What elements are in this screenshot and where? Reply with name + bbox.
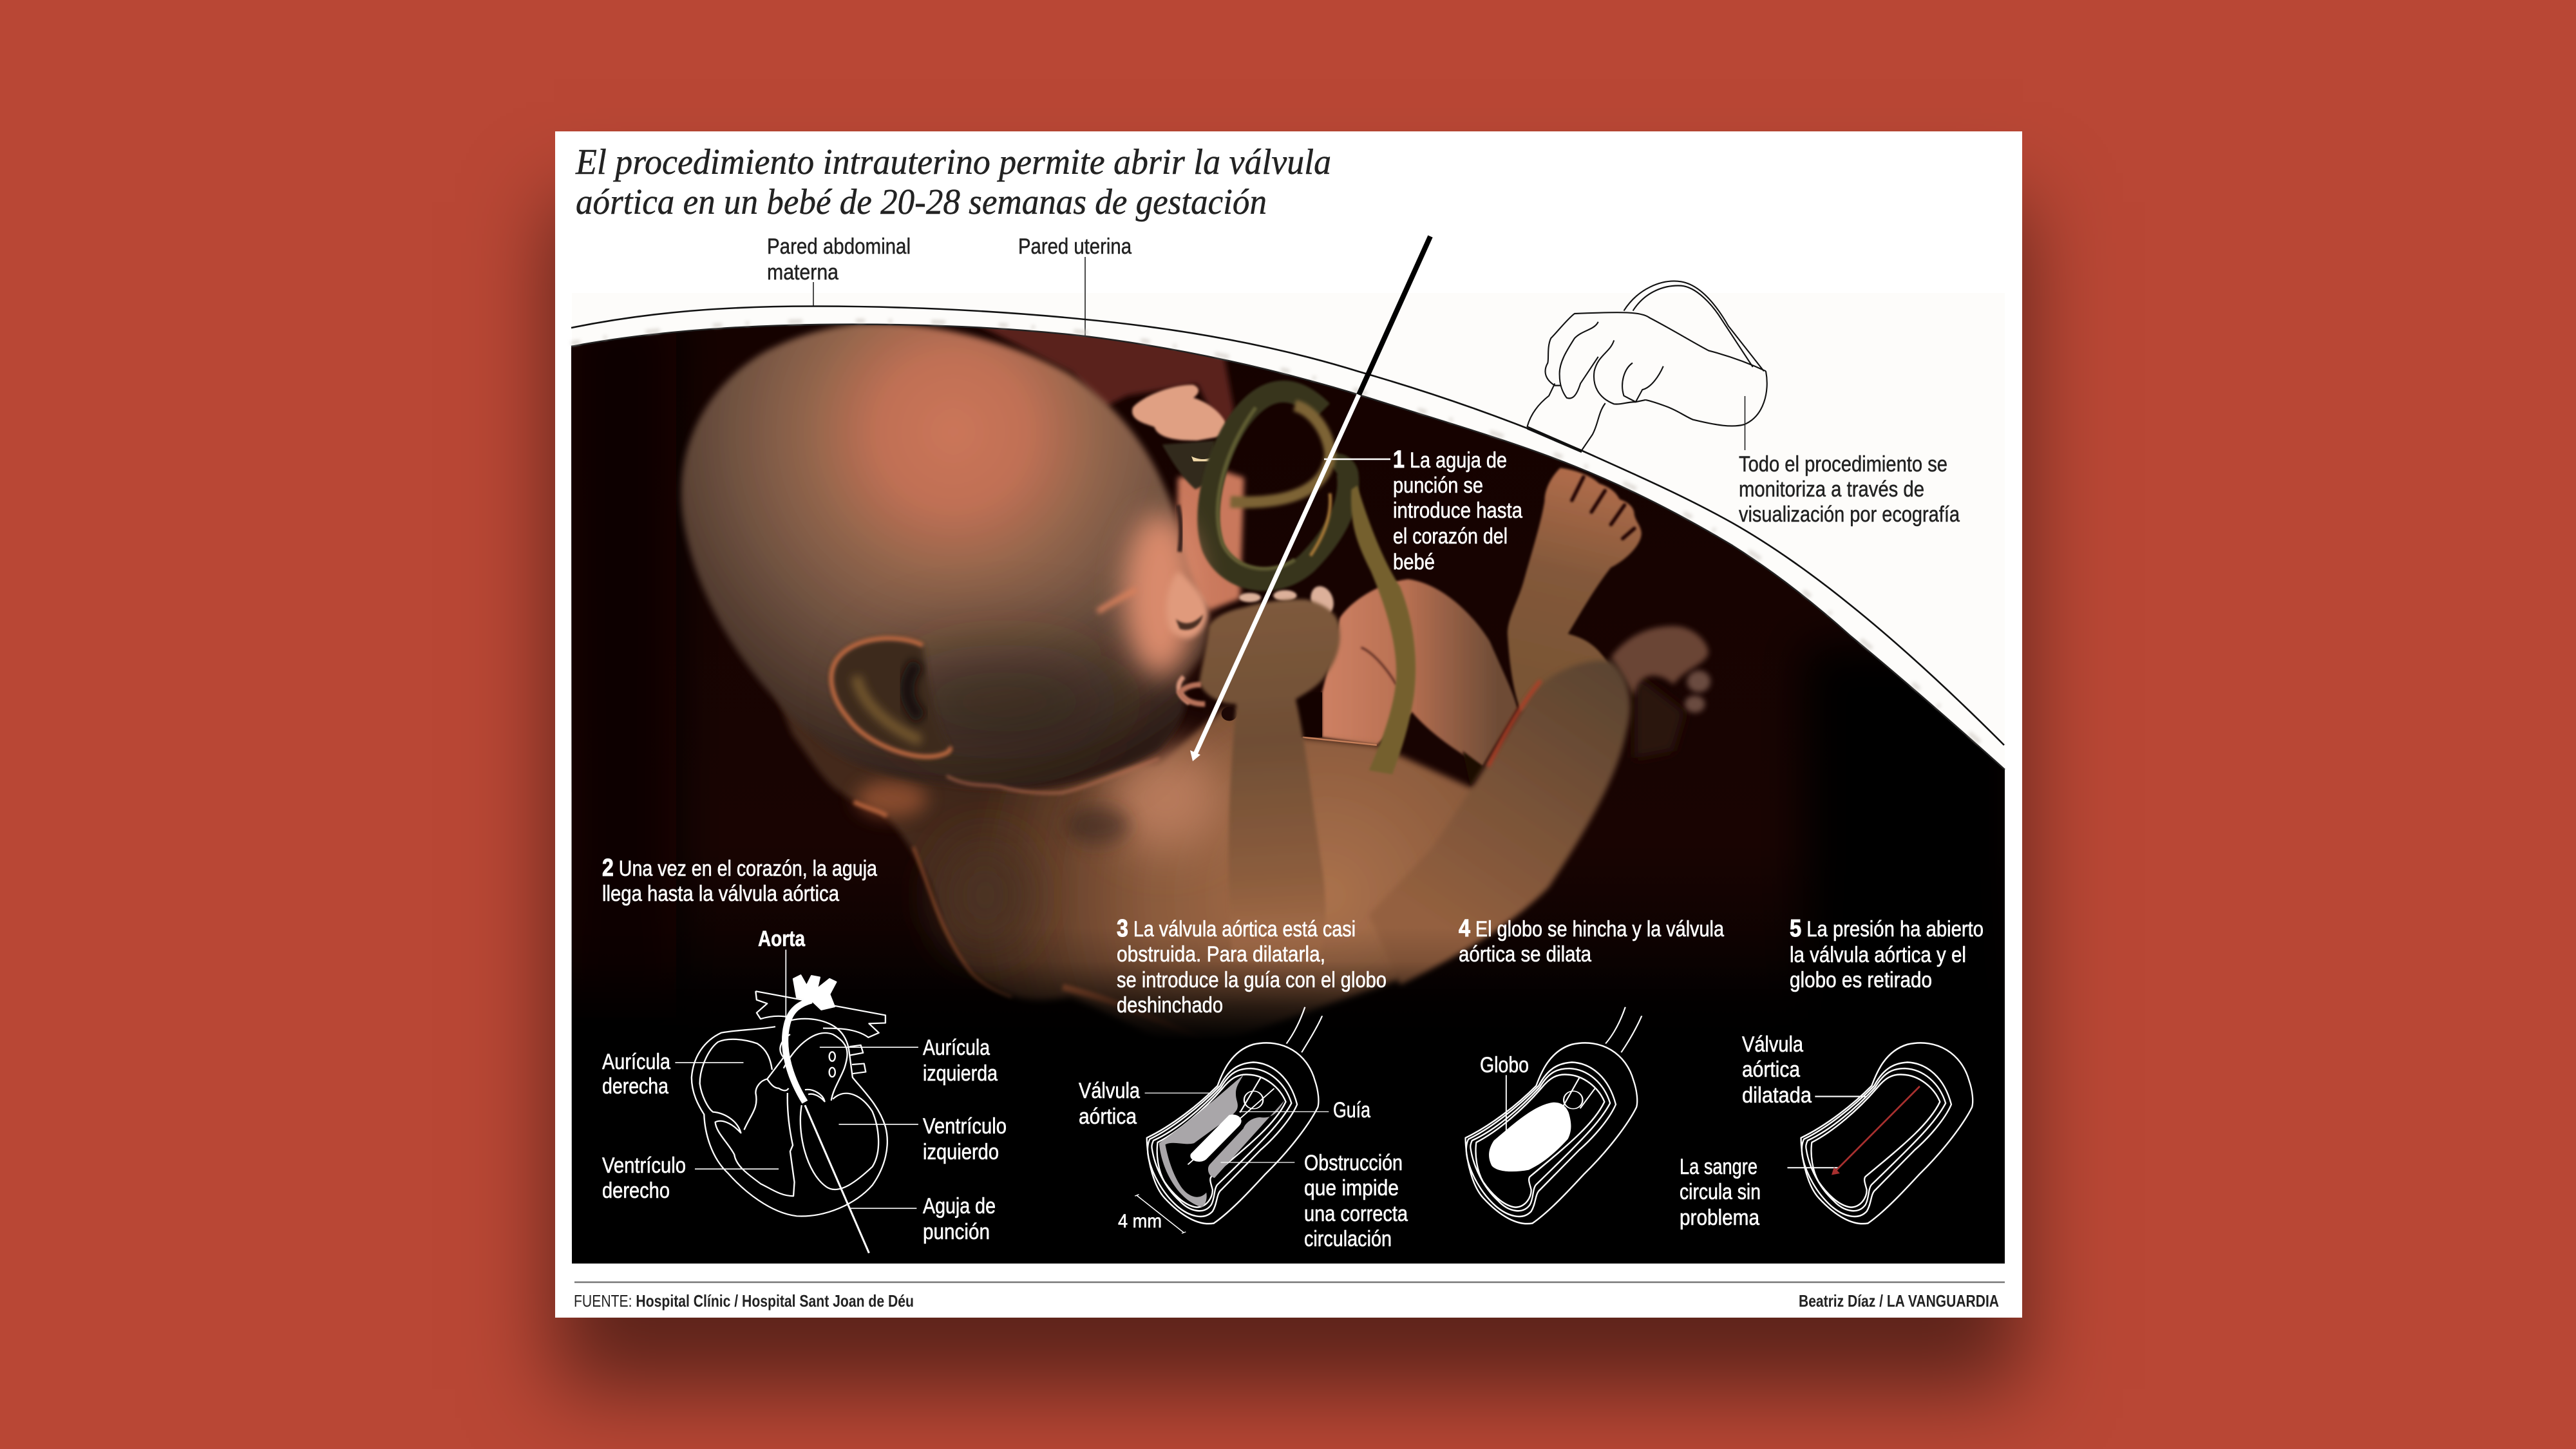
pink thigh beside the fist bbox=[1322, 579, 1517, 766]
right side darkness bbox=[1794, 636, 2005, 971]
step 3 heading: 3 La válvula aórtica está casi bbox=[1117, 915, 1356, 942]
valve diagram 3 labels: una correcta bbox=[1304, 1202, 1408, 1226]
front thigh and knee bbox=[1369, 661, 1631, 985]
fade of the body into black bbox=[567, 927, 2009, 1269]
lip contact under the fist bbox=[1180, 685, 1205, 704]
uterine wall edge line bbox=[571, 325, 2005, 770]
valve diagram 5 labels: circula sin bbox=[1680, 1180, 1761, 1204]
ultrasound note: Todo el procedimiento se bbox=[1739, 452, 1947, 477]
icon: hand holding ultrasound probe bbox=[1527, 281, 1767, 452]
valve diagram 3 labels: que impide bbox=[1304, 1176, 1399, 1200]
step 1 text: punción se bbox=[1393, 473, 1483, 498]
dark gaps by the fist bbox=[1297, 692, 1322, 737]
valve diagram 5 labels: Válvula bbox=[1742, 1032, 1803, 1057]
valve diagram 3 labels: aórtica bbox=[1079, 1104, 1137, 1129]
author credit: Beatriz Díaz / LA VANGUARDIA bbox=[1799, 1291, 1999, 1311]
step 4 heading bbox=[1459, 915, 1724, 967]
step 1 text: bebé bbox=[1393, 550, 1435, 574]
neck and chest light bbox=[857, 747, 1224, 953]
ultrasound note bbox=[1739, 396, 1960, 527]
title: aórtica en un bebé de 20-28 semanas de gestación bbox=[576, 182, 1267, 222]
valve diagram: inflated balloon bbox=[1466, 1007, 1642, 1224]
step 5 heading: 5 La presión ha abierto bbox=[1790, 915, 1984, 942]
step 2 heading: llega hasta la válvula aórtica bbox=[602, 882, 839, 906]
heart labels: punción bbox=[923, 1220, 990, 1244]
heart labels: Aguja de bbox=[923, 1194, 996, 1218]
head lower shadow bbox=[882, 644, 1127, 760]
heart labels: Ventrículo bbox=[923, 1114, 1007, 1139]
valve diagram 3 labels: circulación bbox=[1304, 1227, 1392, 1251]
step 1 text: 1 La aguja de bbox=[1393, 446, 1507, 473]
valve diagram: dilated with blood flow arrow bbox=[1787, 1043, 1973, 1224]
cord tail bbox=[1351, 486, 1416, 774]
head bbox=[681, 323, 1208, 790]
forearm and fist bbox=[1199, 600, 1340, 961]
step 4 heading: aórtica se dilata bbox=[1459, 942, 1591, 967]
valve diagram 5 labels: La sangre bbox=[1680, 1155, 1757, 1179]
step 5 heading: globo es retirado bbox=[1790, 968, 1932, 992]
label: pared uterina: Pared uterina bbox=[1018, 234, 1132, 259]
back rim light bbox=[854, 802, 1206, 1042]
heart labels: derecho bbox=[602, 1179, 670, 1203]
step 1 text bbox=[1324, 446, 1522, 574]
valve diagram 3 labels: Obstrucción bbox=[1304, 1151, 1403, 1175]
dark uterine panel with fetus bbox=[567, 309, 2022, 1269]
valve diagram 3 labels: 4 mm bbox=[1118, 1211, 1162, 1232]
heart labels: Aurícula bbox=[923, 1036, 990, 1060]
crease on the thigh bbox=[1361, 647, 1396, 685]
step 5 heading bbox=[1790, 915, 1984, 992]
valve diagram 5 labels: dilatada bbox=[1742, 1083, 1812, 1108]
arm, fist and cord tail in local coordinates bbox=[1180, 486, 1631, 985]
step 3 heading: deshinchado bbox=[1117, 993, 1223, 1018]
thigh and belly light bbox=[1303, 737, 1377, 745]
footer rule bbox=[574, 1282, 2005, 1283]
uterine wall patch bbox=[978, 328, 1236, 422]
cream outer-body region bbox=[572, 293, 2005, 782]
belly and thigh notch bbox=[1463, 751, 1484, 786]
label: pared abdominal materna: Pared abdominal bbox=[767, 234, 911, 259]
label: pared abdominal materna: materna bbox=[767, 260, 838, 285]
valve diagram 3 labels: Guía bbox=[1333, 1098, 1370, 1122]
face details bbox=[1098, 505, 1208, 703]
heart labels: Ventrículo bbox=[602, 1153, 686, 1178]
valve diagram 5 labels: problema bbox=[1680, 1206, 1759, 1230]
ear bbox=[831, 638, 950, 757]
label: globo: Globo bbox=[1480, 1053, 1529, 1077]
valve diagram 5 labels: aórtica bbox=[1742, 1057, 1800, 1082]
step 4 heading: 4 El globo se hincha y la válvula bbox=[1459, 915, 1724, 942]
heart diagram bbox=[675, 950, 918, 1253]
valve diagram 3 labels: Válvula bbox=[1079, 1079, 1140, 1103]
step 1 text: el corazón del bbox=[1393, 524, 1508, 549]
umbilical cord loop bbox=[1208, 392, 1348, 580]
pink arm behind the cord bbox=[1178, 470, 1244, 611]
valve diagram 5 labels bbox=[1680, 1032, 1812, 1230]
abdominal wall curve bbox=[571, 307, 2004, 745]
step 5 heading: la válvula aórtica y el bbox=[1790, 943, 1966, 967]
label: pared abdominal materna bbox=[767, 234, 911, 307]
hand behind the cord bbox=[1132, 385, 1229, 489]
heart labels: izquierda bbox=[923, 1061, 998, 1086]
step 1 text: introduce hasta bbox=[1393, 498, 1522, 523]
source credit: FUENTE: Hospital Clínic / Hospital Sant Joan de Déu bbox=[574, 1291, 914, 1311]
step 3 heading: obstruida. Para dilatarla, bbox=[1117, 942, 1325, 967]
ultrasound note: visualización por ecografía bbox=[1739, 502, 1960, 527]
fetus details behind the head, drawn in local coordinates bbox=[963, 317, 1710, 766]
fingers bbox=[1239, 583, 1338, 618]
title bbox=[575, 142, 1331, 222]
second foot bbox=[1611, 626, 1710, 759]
title: El procedimiento intrauterino permite abrir la válvula bbox=[575, 142, 1331, 182]
step 3 heading: se introduce la guía con el globo bbox=[1117, 968, 1387, 992]
heart labels: Aorta bbox=[758, 927, 806, 951]
heart labels: derecha bbox=[602, 1074, 668, 1099]
valve diagram: obstructed with deflated balloon bbox=[1135, 1007, 1329, 1233]
foot and shin bbox=[1508, 468, 1642, 712]
torso and back bbox=[766, 670, 1481, 1048]
valve diagram 3 labels bbox=[1079, 1079, 1408, 1251]
ultrasound note: monitoriza a través de bbox=[1739, 477, 1924, 502]
toe gaps bbox=[1572, 477, 1634, 538]
heart labels: Aurícula bbox=[602, 1050, 670, 1074]
step 2 heading: 2 Una vez en el corazón, la aguja bbox=[602, 855, 877, 882]
step 3 heading bbox=[1117, 915, 1387, 1018]
white card with drop shadow bbox=[555, 131, 2022, 1318]
jaw rim light bbox=[947, 759, 1159, 793]
heart labels bbox=[602, 927, 1007, 1244]
puncture needle bbox=[1190, 236, 1430, 761]
red rim light on the knee bbox=[1488, 681, 1540, 766]
heart labels: izquierdo bbox=[923, 1140, 999, 1164]
step 2 heading bbox=[602, 855, 877, 906]
